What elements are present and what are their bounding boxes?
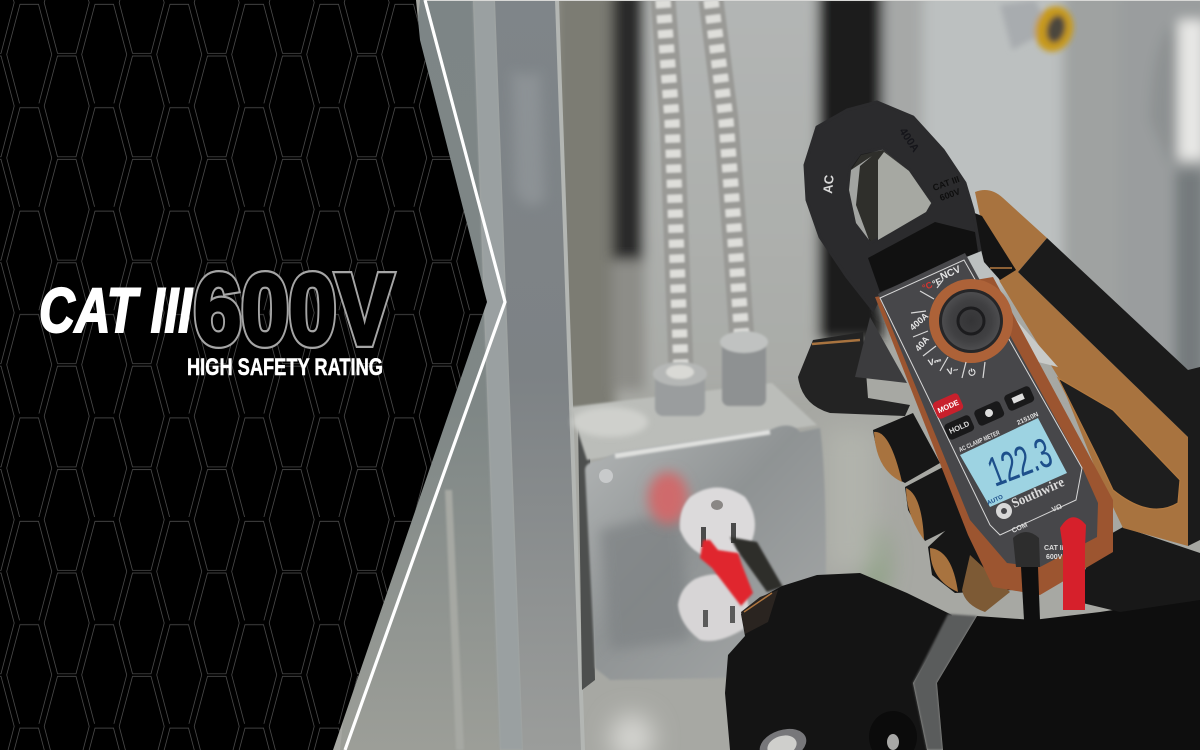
conduit connectors (653, 331, 768, 416)
white chevron line (345, 0, 505, 750)
dial scale labels: °F (931, 276, 944, 289)
blurred background: light spot, green smear (610, 430, 886, 750)
dark strap on thumb (972, 212, 1016, 280)
rotary dial (929, 279, 1013, 363)
clamp jaws (805, 102, 980, 310)
glove logo (756, 723, 810, 750)
model labels (958, 411, 1040, 454)
steel stud (340, 0, 595, 750)
photo background wall (330, 0, 1200, 750)
Southwire brand: Southwire (1010, 475, 1067, 512)
top outlet (680, 488, 755, 560)
dial scale labels (908, 264, 977, 378)
black chevron panel with hexagon pattern (0, 0, 487, 750)
clamp labels: 600V (938, 186, 961, 203)
bottom outlet (678, 574, 750, 641)
clamp meter (805, 102, 1113, 620)
meter jack labels: CAT III (1044, 545, 1066, 552)
dial scale labels: V~ (946, 364, 959, 377)
meter black neck (868, 222, 978, 292)
padded palm (1058, 378, 1180, 509)
cover plate (585, 425, 826, 680)
index finger behind meter (798, 332, 910, 416)
LCD display: AUTO (986, 494, 1005, 507)
model labels: 21510N (1016, 411, 1040, 427)
headline: 600V outline: 600V (194, 254, 393, 366)
fingers under meter (873, 413, 940, 483)
button: mode (932, 392, 964, 420)
clamp labels: 400A (897, 126, 921, 155)
conduit wires (663, 0, 742, 370)
black lead plug (1013, 532, 1040, 620)
black knit back of hand (1018, 238, 1200, 546)
dial scale labels: NCV (939, 264, 963, 283)
red test probe (700, 540, 753, 606)
glove tan back of hand (975, 190, 1188, 546)
sleeve grey band (913, 614, 977, 750)
icon: yellow conduit fitting (1000, 0, 1078, 56)
meter jack labels (1011, 503, 1066, 561)
clamp labels: AC (820, 174, 837, 194)
dial scale labels: ⏻ (968, 367, 977, 378)
glove black lower hand (1070, 527, 1200, 612)
left hand glove (725, 573, 977, 750)
lower jaw stub (855, 317, 907, 383)
Southwire brand (996, 475, 1067, 519)
button: mode: MODE (936, 398, 960, 415)
button: backlight (973, 400, 1005, 427)
black test probe (730, 537, 783, 592)
dial scale labels: °C (921, 279, 934, 293)
junction box with outlets (570, 331, 826, 680)
dial scale labels: 40A (913, 334, 931, 353)
view through clamp opening (849, 150, 931, 241)
wrist snap (869, 711, 917, 750)
headline: 600V outline: 600V (194, 254, 393, 366)
button: hold (943, 414, 975, 441)
button: hold: HOLD (948, 419, 971, 436)
headline block (39, 254, 393, 381)
box top face (570, 383, 817, 460)
light background gap beside meter (1012, 315, 1058, 367)
red lead plug (1060, 517, 1086, 610)
subheading: HIGH SAFETY RATING (187, 354, 383, 381)
clamp labels: CAT III (931, 174, 961, 193)
meter body (875, 277, 1113, 595)
clamp labels (820, 126, 961, 203)
black sleeve (937, 597, 1200, 750)
dial scale labels: V⎓ (927, 355, 943, 368)
photo: electrician testing an outlet with a clamp meter (330, 0, 1200, 750)
meter jack labels: 600V (1046, 554, 1063, 561)
photo top edge highlight (425, 0, 1200, 1)
LCD display: 122.3 (981, 429, 1058, 495)
model labels: AC CLAMP METER (958, 429, 1001, 454)
dial scale labels: 400A (908, 310, 931, 332)
right hand glove (798, 190, 1200, 612)
meter jack labels: COM (1011, 522, 1029, 535)
meter grey face (878, 253, 1098, 567)
meter jack labels: VΩ (1051, 503, 1064, 514)
headline: CAT III: CAT III (39, 276, 193, 346)
LCD display (960, 418, 1067, 507)
button: flashlight (1003, 385, 1035, 412)
